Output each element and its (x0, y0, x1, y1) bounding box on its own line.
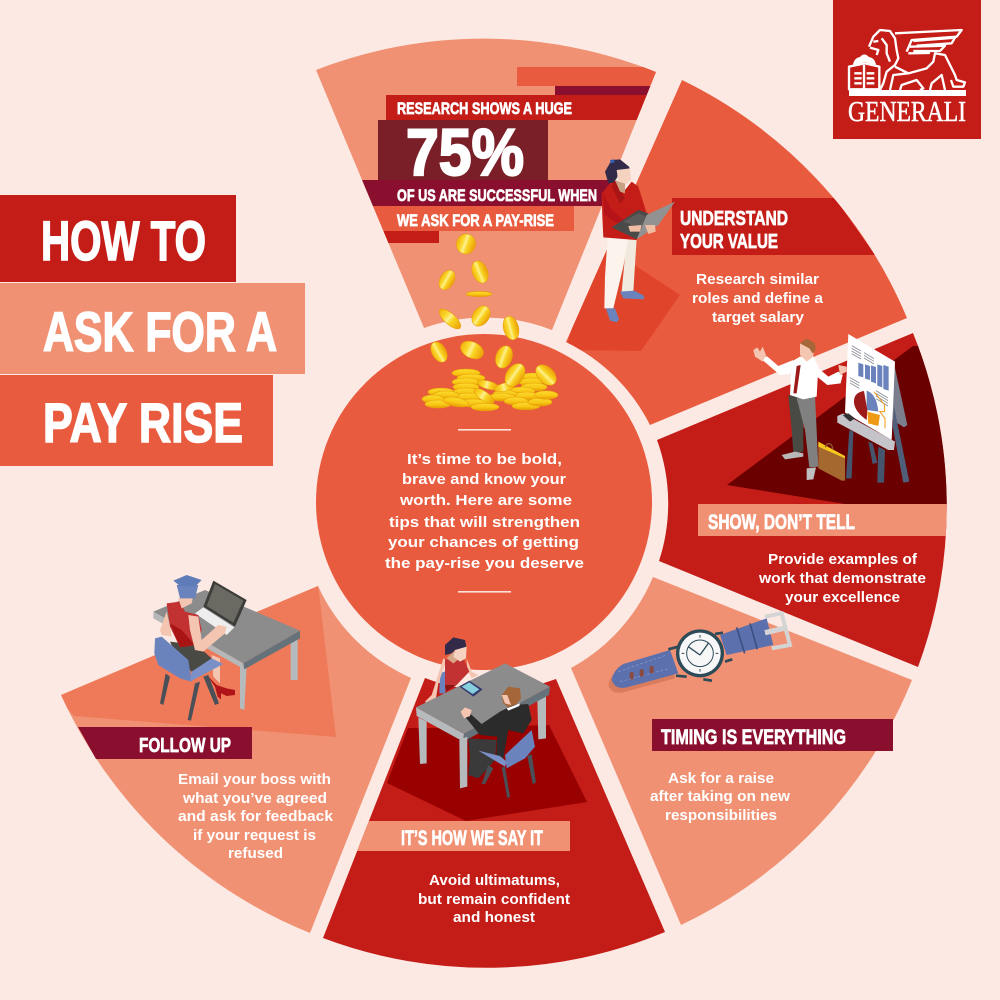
body text: follow up: what you’ve agreed (182, 790, 327, 807)
body text: understand your value (692, 271, 824, 326)
statistic text: 75% (406, 115, 524, 189)
body text: how we say it (418, 872, 570, 926)
body text: show don't tell (758, 551, 926, 606)
logo: Generali: GENERALI (848, 97, 966, 128)
body text: show don't tell: your excellence (785, 589, 900, 606)
centre text (385, 451, 584, 572)
centre text: your chances of getting (388, 534, 579, 551)
body text: follow up: refused (228, 845, 283, 862)
body text: show don't tell: Provide examples of (768, 551, 918, 568)
panel: centre circle (316, 334, 652, 670)
illustration: two people at a meeting table (416, 637, 550, 798)
centre text: the pay-rise you deserve (385, 555, 584, 572)
illustration: man presenting at easel (753, 334, 909, 483)
heading: it's how we say it: IT’S HOW WE SAY IT (401, 826, 543, 850)
body text: follow up: Email your boss with (178, 771, 331, 788)
heading: show don't tell: SHOW, DON’T TELL (708, 510, 855, 534)
body text: how we say it: and honest (453, 909, 535, 926)
statistic text: OF US ARE SUCCESSFUL WHEN (397, 187, 597, 205)
logo: Generali (833, 0, 981, 139)
title: how to ask for a pay rise: PAY RISE (43, 391, 243, 454)
centre text: tips that will strengthen (389, 514, 580, 531)
centre text: worth. Here are some (399, 492, 572, 509)
body text: timing: Ask for a raise (668, 770, 774, 787)
panel: show don't tell (657, 333, 960, 667)
statistic text (397, 100, 597, 230)
heading: understand your value: YOUR VALUE (680, 230, 778, 253)
statistic text: WE ASK FOR A PAY-RISE (397, 212, 554, 230)
centre text: brave and know your (402, 471, 566, 488)
body text: timing: after taking on new (650, 788, 790, 805)
heading: timing is everything: TIMING IS EVERYTHING (661, 725, 846, 749)
body text: timing: responsibilities (665, 807, 777, 824)
heading: understand your value: UNDERSTAND (680, 207, 788, 230)
centre text: It’s time to be bold, (407, 451, 562, 468)
illustration: woman with laptop (602, 159, 675, 322)
body text: follow up: and ask for feedback (178, 808, 334, 825)
title: how to ask for a pay rise: HOW TO (41, 209, 206, 272)
body text: how we say it: but remain confident (418, 891, 570, 908)
body text: timing (650, 770, 790, 824)
statistic text: RESEARCH SHOWS A HUGE (397, 100, 572, 118)
illustration: wristwatch (608, 613, 790, 693)
panel: follow up (55, 584, 411, 933)
icon: falling coins and coin pile (422, 231, 560, 411)
panel: understand your value (565, 80, 907, 425)
body text: understand your value: target salary (712, 309, 805, 326)
title: how to ask for a pay rise (0, 195, 305, 466)
body text: understand your value: roles and define a (692, 290, 824, 307)
heading: understand your value (680, 207, 788, 253)
panel: timing is everything (571, 577, 912, 925)
body text: follow up (178, 771, 334, 862)
heading: follow up: FOLLOW UP (139, 734, 231, 757)
body text: how we say it: Avoid ultimatums, (429, 872, 560, 889)
title: how to ask for a pay rise: ASK FOR A (43, 300, 277, 363)
body text: understand your value: Research similar (696, 271, 819, 288)
panel: it's how we say it (323, 678, 665, 968)
illustration: woman at laptop desk (153, 575, 300, 721)
body text: show don't tell: work that demonstrate (758, 570, 926, 587)
panel: statistic sector (316, 39, 667, 330)
body text: follow up: if your request is (193, 827, 316, 844)
